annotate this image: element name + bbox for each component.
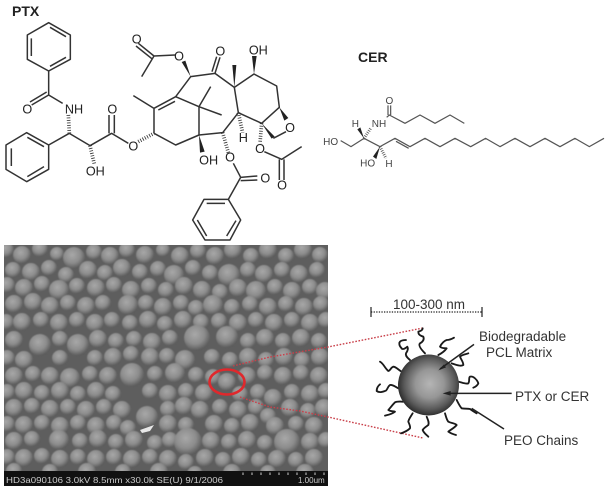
chemical structure: PTX: OH	[199, 153, 218, 167]
SEM info bar	[4, 471, 328, 486]
scale label: 100-300 nm	[393, 297, 465, 312]
chemical structure: PTX: O	[174, 50, 184, 64]
label: PTX or CER: PTX or CER	[515, 389, 590, 404]
chemical structure: PTX: O	[22, 103, 32, 117]
chemical structure: PTX: O	[277, 178, 287, 192]
label: Biodegradable PCL Matrix: PCL Matrix	[486, 345, 553, 360]
PEO chains	[377, 328, 478, 437]
chemical structure: PTX: H	[239, 131, 248, 145]
title: CER: CER	[358, 49, 388, 65]
particle texture	[0, 241, 334, 482]
chemical structure: CER: NH	[372, 119, 386, 130]
bright speck	[140, 425, 154, 433]
chemical structure: PTX: O	[225, 150, 235, 164]
label: PEO Chains: PEO Chains	[504, 433, 579, 448]
label: Biodegradable PCL Matrix: Biodegradable	[479, 329, 566, 344]
chemical structure: PTX: O	[285, 121, 295, 135]
chemical structure: PTX: NH	[65, 102, 83, 116]
SEM info bar: 1.00um	[298, 476, 325, 485]
chemical structure: PTX: O	[260, 172, 270, 186]
chemical structure: CER	[323, 96, 604, 170]
chemical structure: CER: HO	[323, 137, 338, 148]
chemical structure: CER: O	[385, 96, 393, 107]
chemical structure: CER: H	[385, 159, 393, 170]
chemical structure: PTX: O	[107, 103, 117, 117]
particle sphere	[398, 354, 459, 416]
chemical structure: PTX: O	[215, 44, 225, 58]
chemical structure: PTX	[6, 23, 302, 240]
chemical structure: PTX: O	[132, 32, 142, 46]
nanoparticle diagram	[371, 297, 590, 448]
SEM info bar: HD3a090106 3.0kV 8.5mm x30.0k SE(U) 9/1/2006	[6, 476, 224, 485]
leader lines	[438, 344, 512, 429]
chemical structure: PTX: O	[255, 142, 265, 156]
chemical structure: CER: HO	[360, 159, 375, 170]
title: PTX: PTX	[12, 3, 40, 19]
red circle highlighting one particle	[210, 370, 244, 394]
chemical structure: PTX: O	[128, 140, 138, 154]
SEM micrograph	[0, 241, 334, 486]
chemical structure: PTX: OH	[249, 43, 268, 57]
chemical structure: CER: H	[352, 119, 359, 130]
chemical structure: PTX: OH	[86, 164, 105, 178]
scale bar	[371, 307, 482, 317]
dotted zoom lines	[233, 328, 423, 438]
